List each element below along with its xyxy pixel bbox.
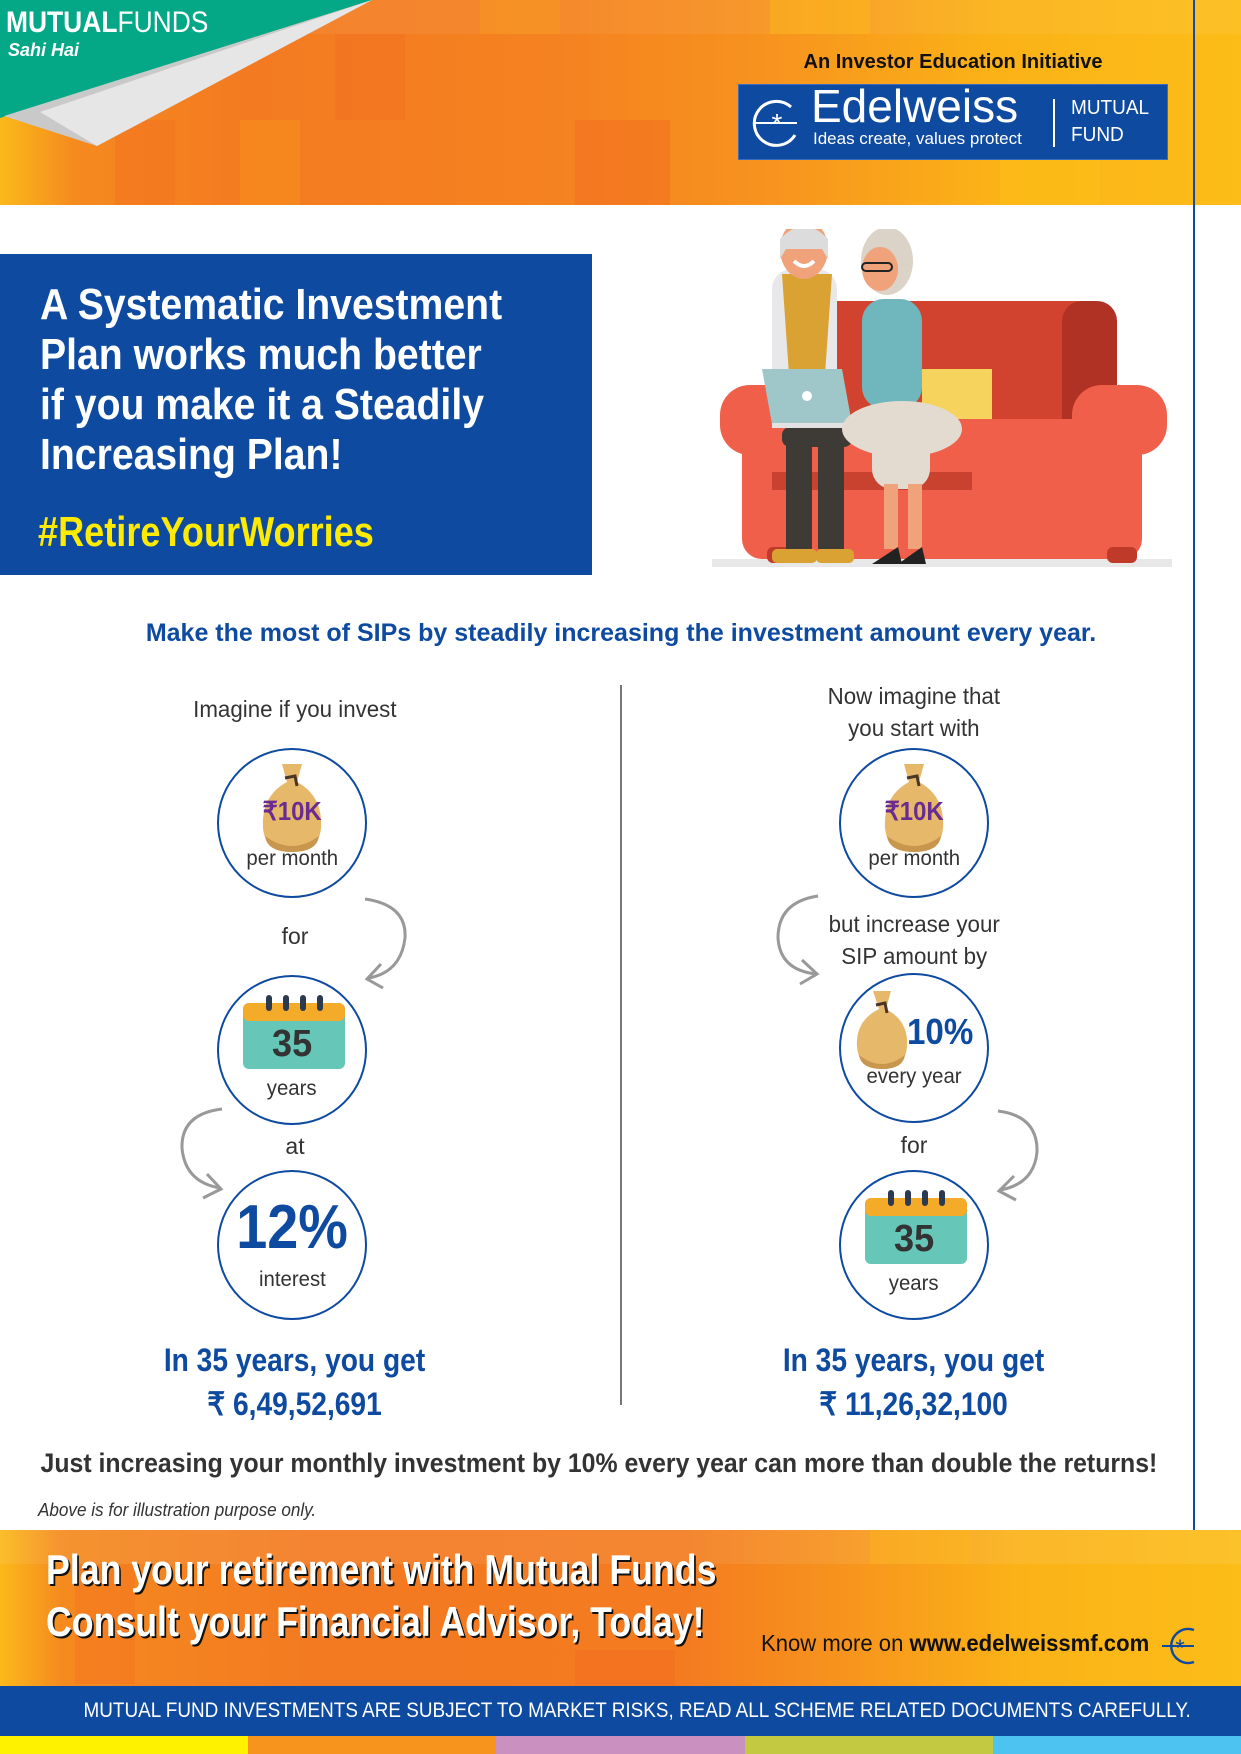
increase text: but increase your <box>828 911 1000 937</box>
result text <box>783 1342 1045 1422</box>
panel: right column (step-up SIP) <box>783 683 1045 1422</box>
CTA heading <box>46 1546 717 1646</box>
woman <box>861 227 913 295</box>
arrow: left 1 <box>364 898 407 990</box>
intro text: Imagine if you invest <box>193 696 397 722</box>
logo: Edelweiss Mutual Fund <box>738 84 1168 160</box>
circle: 10% every year: every year <box>866 1065 962 1088</box>
intro text <box>828 683 1000 741</box>
logo: Mutual Funds Sahi Hai corner: MUTUALFUNDS <box>6 6 208 39</box>
disclaimer band: MUTUAL FUND INVESTMENTS ARE SUBJECT TO MARKET RISKS, READ ALL SCHEME RELATED DOCUMENTS CAREFULLY. <box>84 1699 1191 1722</box>
panel: left column (fixed SIP) <box>164 696 426 1422</box>
circle: 10% every year: 10% <box>907 1011 973 1052</box>
title text: if you make it a Steadily <box>40 380 484 429</box>
circle: 10K per month: per month <box>868 847 960 870</box>
logo: Edelweiss Mutual Fund: MUTUAL <box>1071 97 1149 119</box>
colour strip <box>0 1736 1241 1754</box>
logo: Mutual Funds Sahi Hai corner: Sahi Hai <box>8 40 79 60</box>
subtitle: Make the most of SIPs by steadily increasing the investment amount every year. <box>146 619 1096 647</box>
intro text: Now imagine that <box>828 683 1000 709</box>
title panel <box>0 254 592 575</box>
circle: 35 years <box>217 975 367 1125</box>
vertical blue line <box>1193 0 1195 1686</box>
circle: 35 years: 35 <box>894 1218 934 1260</box>
logo: Edelweiss Mutual Fund: FUND <box>1071 124 1124 146</box>
circle: 10K per month: ₹10K <box>262 796 322 826</box>
disclaimer band <box>0 1686 1241 1736</box>
circle: 10% every year <box>839 973 989 1123</box>
arrow: right 2 <box>996 1110 1038 1202</box>
circle: 12% interest: interest <box>259 1268 325 1291</box>
hashtag: #RetireYourWorries <box>38 508 374 555</box>
header band <box>0 0 1241 205</box>
increase text: SIP amount by <box>841 943 987 969</box>
arrow: left 2 <box>180 1108 224 1200</box>
logo: Edelweiss Mutual Fund: Edelweiss <box>811 80 1018 132</box>
logo: Mutual Funds Sahi Hai corner <box>0 0 372 146</box>
title text <box>40 280 502 479</box>
icon: edelweiss mark <box>1162 1628 1194 1664</box>
CTA heading: Plan your retirement with Mutual Funds <box>46 1546 716 1593</box>
result text: ₹ 6,49,52,691 <box>208 1386 382 1422</box>
icon: edelweiss mark: * <box>1175 1635 1185 1662</box>
logo: Edelweiss Mutual Fund: Ideas create, values protect <box>813 129 1022 148</box>
text: for: for <box>901 1132 927 1158</box>
intro text: you start with <box>848 715 980 741</box>
circle: 35 years: years <box>889 1272 939 1295</box>
circle: 10K per month: per month <box>246 847 338 870</box>
initiative text: An Investor Education Initiative <box>804 51 1102 73</box>
increase text <box>828 911 1000 969</box>
logo: Edelweiss Mutual Fund: * <box>772 108 783 139</box>
result text: ₹ 11,26,32,100 <box>820 1386 1008 1422</box>
title text: Plan works much better <box>40 330 482 379</box>
man <box>772 269 837 409</box>
circle: 10K per month: ₹10K <box>884 796 944 826</box>
result text: In 35 years, you get <box>783 1342 1045 1378</box>
circle: 35 years: years <box>267 1077 317 1100</box>
divider <box>620 685 622 1405</box>
title text: A Systematic Investment <box>40 280 502 329</box>
illustration: couple on sofa <box>712 229 1172 567</box>
conclusion text: Just increasing your monthly investment by 10% every year can more than double the returns! <box>41 1448 1157 1478</box>
circle: 35 years: 35 <box>272 1023 312 1065</box>
circle: 10K per month <box>217 748 367 898</box>
disclaimer note: Above is for illustration purpose only. <box>38 1500 316 1520</box>
title text: Increasing Plan! <box>40 430 343 479</box>
website: Know more on www.edelweissmf.com <box>761 1630 1149 1656</box>
circle: 35 years <box>839 1170 989 1320</box>
text: for: for <box>282 923 308 949</box>
circle: 12% interest <box>217 1170 367 1320</box>
CTA heading: Consult your Financial Advisor, Today! <box>46 1598 705 1645</box>
result text: In 35 years, you get <box>164 1342 426 1378</box>
circle: 12% interest: 12% <box>236 1193 348 1262</box>
text: at: at <box>285 1133 305 1159</box>
circle: 10K per month <box>839 748 989 898</box>
bottom CTA band <box>0 1530 1241 1686</box>
result text <box>164 1342 426 1422</box>
arrow: right 1 <box>776 894 820 986</box>
